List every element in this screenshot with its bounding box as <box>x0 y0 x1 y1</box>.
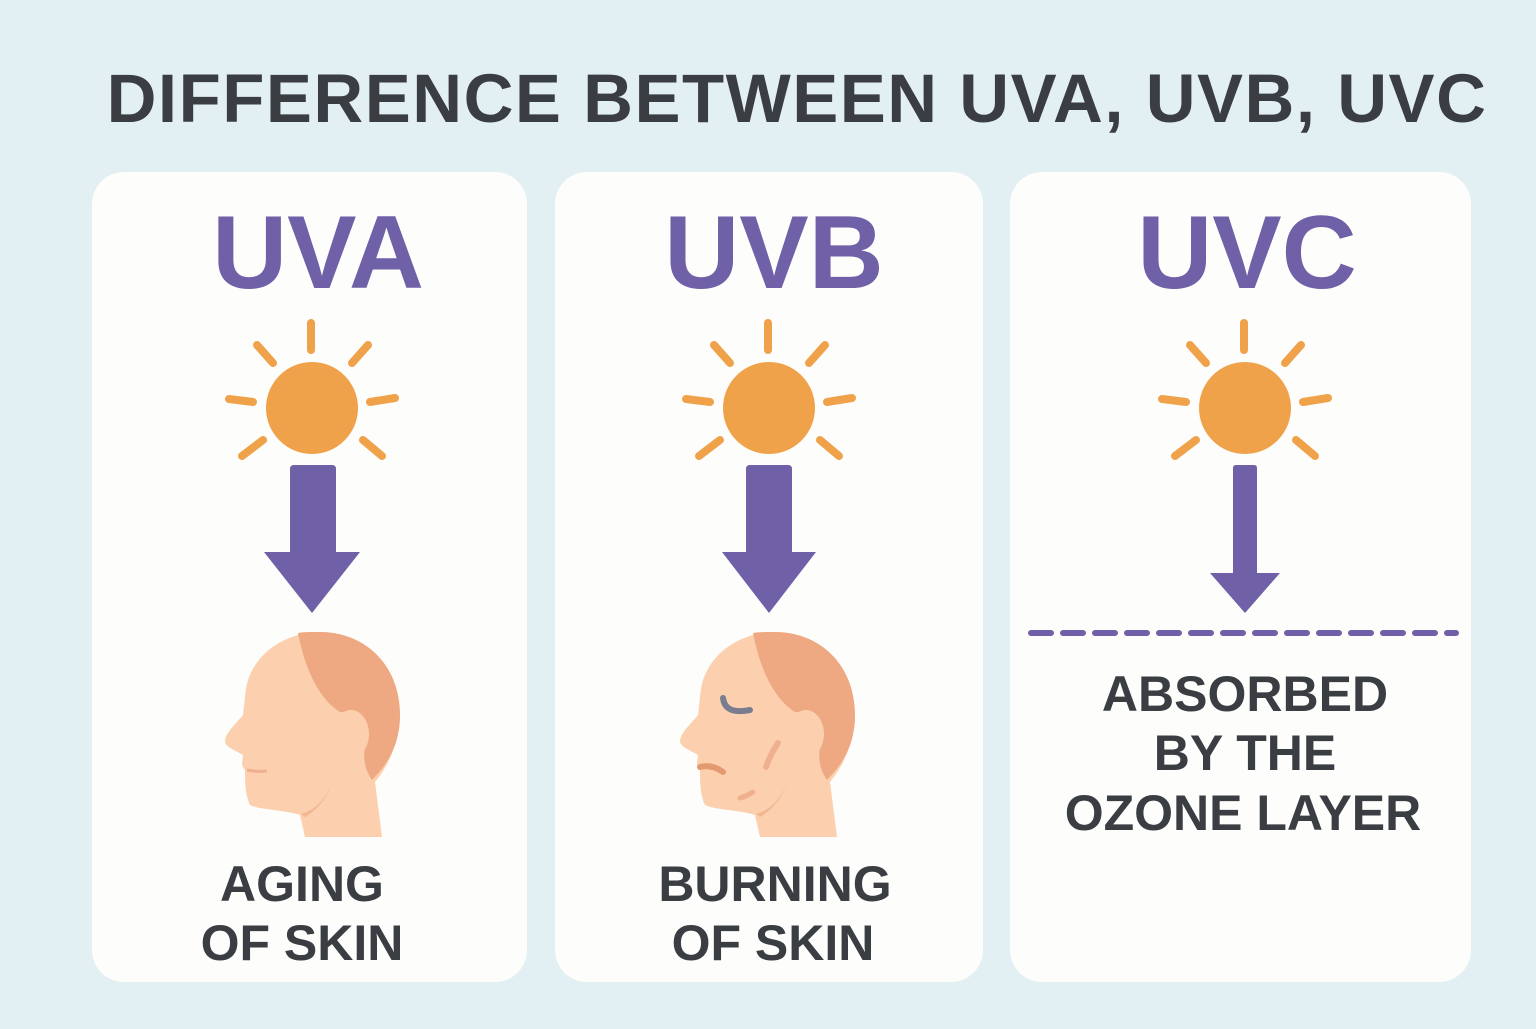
arrow: UVB <box>722 465 816 613</box>
heading: UVC: UVC <box>1137 195 1357 311</box>
ozone dashed line <box>1031 630 1456 636</box>
icon: head UVA <box>225 632 400 837</box>
text: aging of skin: AGING <box>220 856 384 912</box>
icon: sun UVA <box>229 323 395 456</box>
arrow: UVC <box>1210 465 1280 613</box>
text: burning: BURNING <box>658 856 892 912</box>
arrow: UVA <box>264 465 360 613</box>
title: DIFFERENCE BETWEEN UVA, UVB, UVC <box>107 60 1487 137</box>
text: of skin UVB: OF SKIN <box>672 915 874 971</box>
heading: UVB: UVB <box>664 195 884 311</box>
panel: UVC <box>1010 172 1471 982</box>
panel: UVA <box>92 172 527 982</box>
heading: UVA: UVA <box>212 195 424 311</box>
text: absorbed: ABSORBED <box>1102 666 1388 722</box>
panel: UVB <box>555 172 983 982</box>
text: by the: BY THE <box>1154 725 1336 781</box>
icon: sun UVB <box>686 323 852 456</box>
text: ozone layer: OZONE LAYER <box>1065 785 1421 841</box>
text: of skin UVA: OF SKIN <box>201 915 403 971</box>
icon: sun UVC <box>1162 323 1328 456</box>
icon: head UVB with burns <box>680 632 855 837</box>
